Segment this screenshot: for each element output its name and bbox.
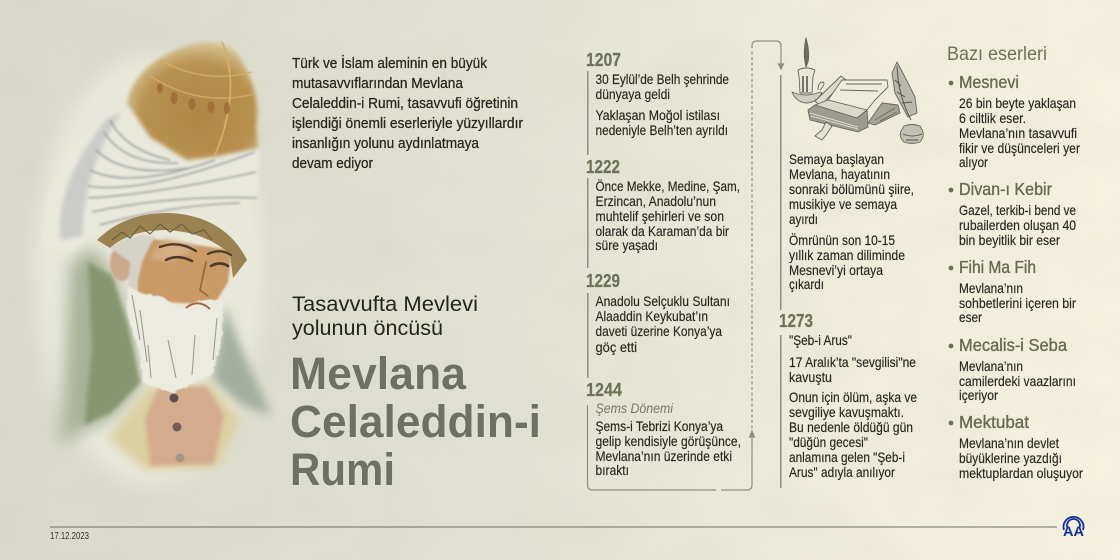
timeline entry: 1229: göç etti	[596, 340, 637, 355]
timeline connector arrow	[588, 41, 784, 490]
timeline entry: 1229: 1229	[586, 271, 620, 291]
work: Divan-ı Kebir: Divan-ı Kebir	[959, 179, 1052, 199]
cap band	[97, 213, 247, 278]
timeline entry: 1244	[586, 380, 741, 478]
work: Mektubat	[949, 412, 1083, 481]
work: Fihi Ma Fih: eser	[959, 310, 982, 325]
turban white wrap	[40, 103, 260, 253]
subtitle: yolunun öncüsü	[292, 317, 443, 340]
timeline entry: 1273: "Şeb-i Arus"	[789, 333, 852, 348]
main title: Celaleddin-i	[290, 396, 541, 447]
logo: AA: AA	[1063, 523, 1084, 539]
intro text block: Türk ve İslam aleminin en büyük	[292, 54, 488, 72]
robe: green cloak	[60, 247, 272, 443]
timeline column 2: Sema text: Semaya başlayan	[789, 152, 884, 167]
intro text block: insanlığın yolunu aydınlatmaya	[292, 136, 479, 152]
face	[134, 238, 232, 305]
heading: Bazı eserleri: Bazı eserleri	[947, 44, 1047, 65]
beard	[127, 287, 223, 393]
timeline entry: 1244: gelip kendisiyle görüşünce,	[596, 434, 741, 449]
work: Fihi Ma Fih: sohbetlerini içeren bir	[959, 296, 1076, 311]
timeline entry: 1207	[586, 50, 729, 155]
timeline entry: 1222: 1222	[586, 157, 620, 177]
work: Mektubat: Mevlana’nın devlet	[959, 436, 1059, 451]
intro text block: devam ediyor	[292, 156, 373, 172]
work: Mecalis-i Seba: Mevlana’nın	[959, 359, 1023, 374]
logo: AA	[1063, 517, 1084, 539]
pale halo	[35, 55, 265, 485]
work: Divan-ı Kebir	[949, 179, 1076, 248]
work: Mektubat: mektuplardan oluşuyor	[959, 466, 1083, 481]
turban dome	[127, 42, 258, 160]
work: Mesnevi: 26 bin beyte yaklaşan	[959, 96, 1076, 111]
eyes and brows	[160, 244, 231, 296]
timeline entry: 1273: Arus" adıyla anılıyor	[789, 465, 895, 480]
timeline column 2: Sema text: musikiye ve semaya	[789, 197, 897, 212]
timeline entry: 1273: Bu nedenle öldüğü gün	[789, 420, 913, 435]
work: Mesnevi: Mevlana’nın tasavvufi	[959, 126, 1077, 141]
timeline entry: 1229: Alaaddin Keykubat’ın	[596, 309, 708, 324]
ear	[110, 245, 134, 281]
timeline entry: 1244: bıraktı	[596, 463, 629, 478]
shirt buttons	[170, 394, 184, 462]
date: 17.12.2023	[50, 531, 89, 542]
timeline entry: 1229	[586, 271, 730, 378]
timeline entry: 1222: süre yaşadı	[596, 238, 658, 253]
hair	[110, 235, 155, 290]
intro text block: mutasavvıflarından Mevlana	[292, 76, 463, 92]
work: Mecalis-i Seba: camilerdeki vaazlarını	[959, 374, 1076, 389]
timeline column 2: Sema text	[780, 75, 914, 310]
timeline entry: 1244: Şems Dönemi	[596, 401, 674, 416]
timeline column 2: Sema text: çıkardı	[789, 277, 824, 292]
work: Mesnevi	[949, 72, 1080, 170]
subtitle: Tasavvufta Mevlevi	[292, 293, 478, 316]
work: Mecalis-i Seba	[949, 335, 1076, 403]
timeline column 2: Sema text: Mevlana, hayatının	[789, 167, 890, 182]
intro text block: Celaleddin-i Rumi, tasavvufi öğretinin	[292, 96, 518, 112]
timeline entry: 1207: dünyaya geldi	[596, 87, 670, 102]
timeline entry: 1273	[779, 311, 917, 488]
timeline entry: 1222: muhtelif şehirleri ve son	[596, 209, 724, 224]
footer line	[50, 526, 1057, 528]
timeline column 2: Sema text: yıllık zaman diliminde	[789, 248, 905, 263]
inkwell	[900, 124, 923, 144]
open book	[808, 80, 900, 140]
work: Mektubat: Mektubat	[959, 412, 1029, 432]
work: Divan-ı Kebir: rubailerden oluşan 40	[959, 218, 1076, 233]
timeline column 2: Sema text: ayırdı	[789, 212, 818, 227]
timeline entry: 1244: 1244	[586, 380, 622, 400]
work: Divan-ı Kebir: Gazel, terkib-i bend ve	[959, 203, 1076, 218]
timeline column 2: Sema text: Mesnevi’yi ortaya	[789, 263, 883, 278]
timeline entry: 1244: Mevlana’nın üzerinde etki	[596, 449, 732, 464]
work: Mesnevi: Mesnevi	[959, 72, 1019, 92]
work: Mektubat: büyüklerine yazdığı	[959, 451, 1062, 466]
timeline entry: 1222: Önce Mekke, Medine, Şam,	[596, 179, 740, 194]
main title: Mevlana	[290, 348, 467, 399]
timeline entry: 1273: Onun için ölüm, aşka ve	[789, 390, 917, 405]
timeline column 2: Sema text: sonraki bölümünü şiire,	[789, 182, 914, 197]
timeline entry: 1222: Erzincan, Anadolu’nun	[596, 194, 716, 209]
robe: shirt	[108, 384, 240, 470]
work: Mecalis-i Seba: Mecalis-i Seba	[959, 335, 1067, 355]
timeline entry: 1273: anlamına gelen "Şeb-i	[789, 450, 905, 465]
feather	[892, 62, 917, 120]
intro text block: işlendiği önemli eserleriyle yüzyıllardır	[292, 116, 523, 132]
timeline entry: 1229: Anadolu Selçuklu Sultanı	[596, 294, 730, 309]
icon: candle, book, feather and inkwell	[792, 38, 923, 144]
timeline entry: 1273: 17 Aralık’ta "sevgilisi"ne	[789, 355, 916, 370]
timeline entry: 1207: 1207	[586, 50, 621, 70]
timeline entry: 1273: sevgiliye kavuşmaktı.	[789, 405, 904, 420]
intro text block	[292, 54, 523, 172]
timeline entry: 1207: Yaklaşan Moğol istilası	[596, 108, 720, 123]
forehead shade	[150, 238, 225, 262]
candle	[792, 38, 824, 103]
work: Fihi Ma Fih: Fihi Ma Fih	[959, 257, 1036, 277]
timeline entry: 1273: kavuştu	[789, 370, 832, 385]
timeline entry: 1244: Şems-i Tebrizi Konya’ya	[596, 419, 723, 434]
timeline entry: 1229: daveti üzerine Konya’ya	[596, 324, 722, 339]
timeline entry: 1207: nedeniyle Belh’ten ayrıldı	[596, 123, 728, 138]
subtitle	[292, 293, 478, 340]
work: Fihi Ma Fih: Mevlana’nın	[959, 281, 1023, 296]
work: Mesnevi: 6 ciltlik eser.	[959, 111, 1026, 126]
work: Mecalis-i Seba: içeriyor	[959, 388, 998, 403]
main title: Rumi	[290, 444, 395, 495]
work: Divan-ı Kebir: bin beyitlik bir eser	[959, 233, 1060, 248]
timeline entry: 1207: 30 Eylül’de Belh şehrinde	[596, 72, 729, 87]
main title	[290, 348, 541, 495]
timeline column 2: Sema text: Ömrünün son 10-15	[789, 233, 895, 248]
work: Mesnevi: fikir ve düşünceleri yer	[959, 141, 1080, 156]
portrait of Mevlana	[35, 42, 272, 485]
timeline entry: 1222: olarak da Karaman’da bir	[596, 224, 729, 239]
timeline entry: 1273: "düğün gecesi"	[789, 435, 868, 450]
scroll	[815, 76, 846, 106]
timeline entry: 1273: 1273	[779, 311, 813, 331]
work: Mesnevi: alıyor	[959, 155, 988, 170]
work: Fihi Ma Fih	[949, 257, 1076, 325]
timeline entry: 1222	[586, 157, 740, 268]
